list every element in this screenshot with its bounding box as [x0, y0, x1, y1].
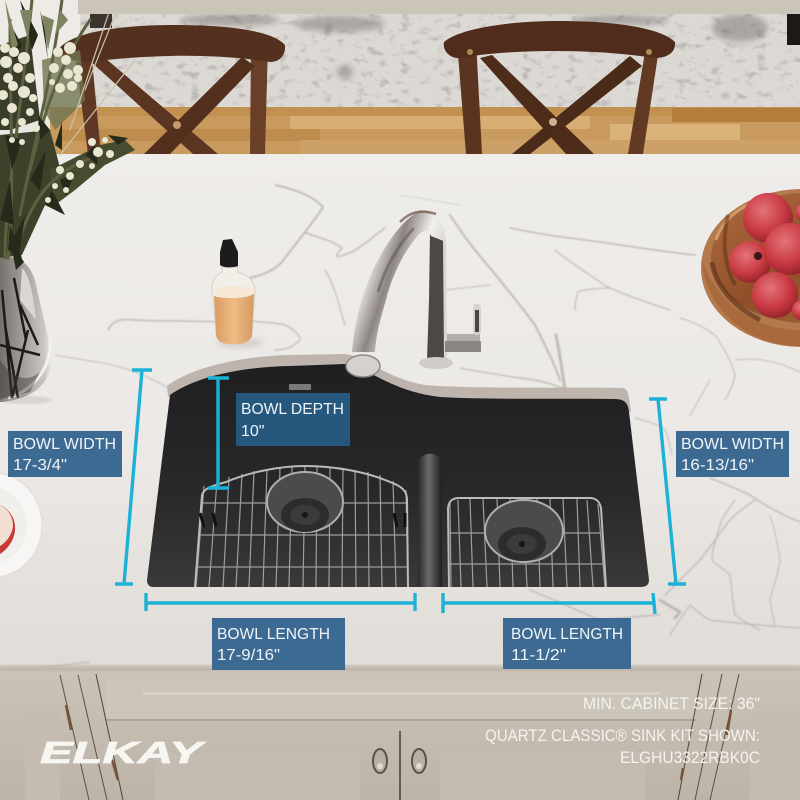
faucet lever [445, 304, 481, 352]
cabinet [0, 665, 800, 800]
label: bowl depth: 10" [241, 423, 264, 440]
label: bowl depth: BOWL DEPTH [241, 401, 344, 418]
sink kit note [485, 726, 760, 767]
soap pump [220, 239, 238, 267]
label: left bowl width: BOWL WIDTH [13, 436, 116, 453]
label: left bowl width: 17-3/4" [13, 457, 67, 474]
sink kit note: QUARTZ CLASSIC® SINK KIT SHOWN: [485, 726, 760, 745]
sink kit note: ELGHU3322RBK0C [620, 748, 760, 767]
dimension: left bowl width [115, 370, 152, 584]
faucet spout [352, 211, 446, 352]
label: left bowl width [8, 431, 122, 477]
label: left bowl length [212, 618, 345, 670]
fruit bowl [701, 189, 800, 347]
left bottom grid [195, 466, 408, 587]
label: right bowl width: 16-13/16" [681, 457, 754, 474]
sink divider [418, 454, 442, 587]
cabinet size note: MIN. CABINET SIZE: 36" [583, 694, 760, 713]
right strainer [485, 500, 563, 562]
label: right bowl width [676, 431, 789, 477]
background: wood floor [50, 107, 800, 154]
flowering plant [0, 0, 135, 270]
faucet [346, 211, 481, 377]
faucet spout collar [346, 355, 380, 377]
soap bottle [212, 239, 264, 348]
label: bowl depth [236, 393, 350, 446]
label: right bowl length: BOWL LENGTH [511, 626, 623, 643]
marble countertop [0, 154, 800, 670]
Elkay logo: ELKAY [40, 735, 207, 770]
left strainer [267, 472, 343, 532]
marble veins [20, 185, 800, 670]
faucet body [427, 232, 447, 360]
plate with apple slice [0, 473, 42, 577]
label: left bowl length: BOWL LENGTH [217, 626, 330, 643]
sink brand plate [289, 384, 311, 390]
label: right bowl width: BOWL WIDTH [681, 436, 784, 453]
label: right bowl length [503, 618, 631, 669]
sink basin [147, 364, 649, 587]
sink rim [167, 354, 631, 420]
faucet base [419, 357, 453, 369]
apple slice [0, 505, 15, 554]
plant dark foliage mass [0, 130, 62, 258]
dimension: bowl depth [208, 378, 229, 488]
cabinet knobs [373, 749, 426, 773]
dimension: right bowl width [649, 399, 686, 584]
cabinet gaps and hinges [60, 674, 739, 800]
chair left [58, 25, 285, 154]
background: rug [0, 0, 800, 110]
right bottom grid [448, 498, 606, 587]
apples [729, 193, 800, 320]
label: right bowl length: 11-1/2" [511, 647, 566, 664]
label: left bowl length: 17-9/16" [217, 647, 280, 664]
cabinet door panels [25, 712, 800, 800]
vase [0, 257, 52, 404]
sink [147, 354, 649, 587]
cabinet drawer panel [106, 680, 696, 721]
dimension: right bowl length [443, 593, 655, 614]
chair right [444, 21, 675, 154]
dimension: left bowl length [146, 593, 415, 611]
